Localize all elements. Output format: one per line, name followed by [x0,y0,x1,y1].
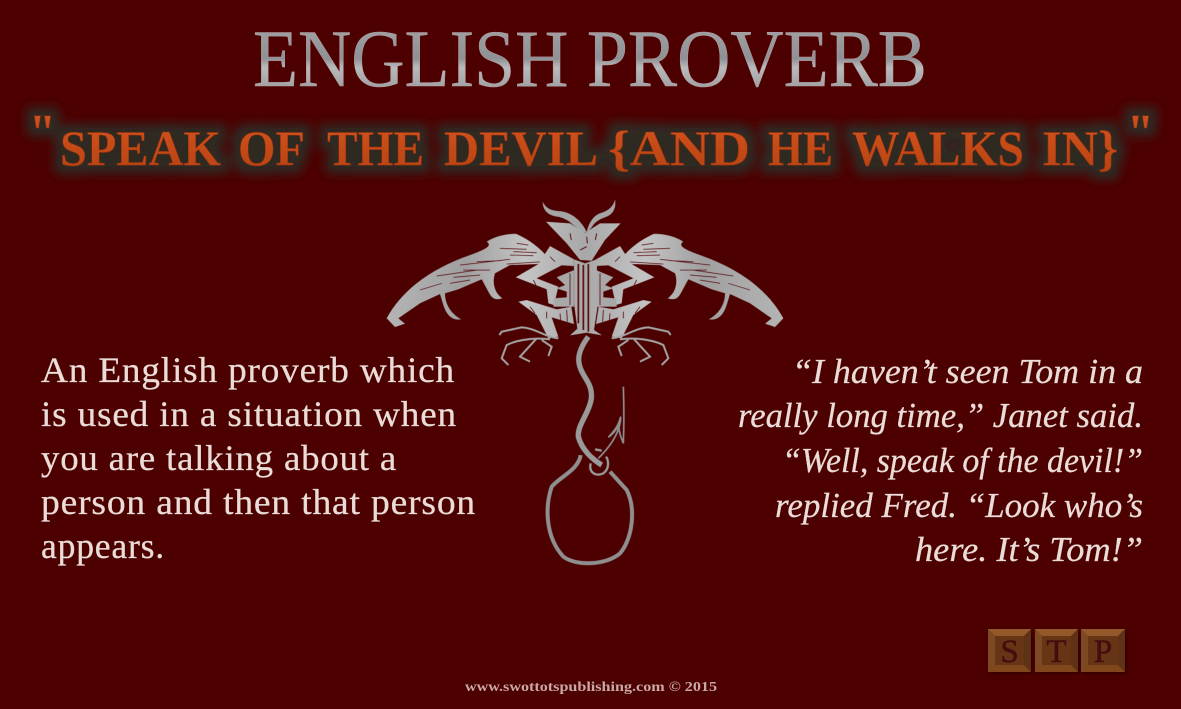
text block: example dialogue: really long time,” Janet said. [738,396,1143,435]
subtitle proverb: DEVIL [444,120,598,176]
icon: tail [578,337,602,465]
icon: small loop [590,449,608,475]
tile P: P [1094,634,1112,670]
text block: definition: person and then that person [41,482,476,522]
icon: left horn [543,202,587,233]
subtitle proverb: {AND [608,120,750,176]
tile T: T [1046,634,1067,670]
subtitle proverb: WALKS [852,120,1024,176]
text block: example dialogue: replied Fred. “Look who’s [775,486,1143,525]
icon: left wing and limb [387,234,574,365]
text block: example dialogue: “I haven’t seen Tom in a [792,352,1143,391]
icon: head [546,222,621,261]
text block: example dialogue [738,352,1143,569]
text block: definition [41,350,476,566]
subtitle proverb: SPEAK [60,120,221,176]
icon: silver devil emblem [387,199,783,563]
icon: right wing and limb [596,234,783,365]
subtitle proverb: " [29,105,56,162]
tile S: S [1000,634,1019,670]
subtitle proverb: " [1127,105,1154,162]
icon: right horn [587,199,615,233]
text block: definition: is used in a situation when [41,394,457,434]
logo: STP tiles [988,629,1125,672]
subtitle proverb: HE [768,120,833,176]
icon: hanging ring [548,455,632,563]
icon: central spine [570,259,602,335]
text block: definition: appears. [41,526,165,566]
text block: definition: An English proverb which [41,350,455,390]
title: ENGLISH PROVERB [253,13,927,104]
subtitle proverb: IN} [1042,120,1118,176]
icon: head hatching [570,233,597,250]
text block: example dialogue: here. It’s Tom!” [915,530,1143,569]
subtitle proverb [29,105,1154,176]
subtitle proverb: THE [327,120,424,176]
icon: tail tip [598,387,624,458]
text block: definition: you are talking about a [41,438,397,478]
footer credit: www.swottotspublishing.com © 2015 [465,680,717,695]
text block: example dialogue: “Well, speak of the devil!” [782,441,1143,480]
subtitle proverb: OF [238,120,305,176]
